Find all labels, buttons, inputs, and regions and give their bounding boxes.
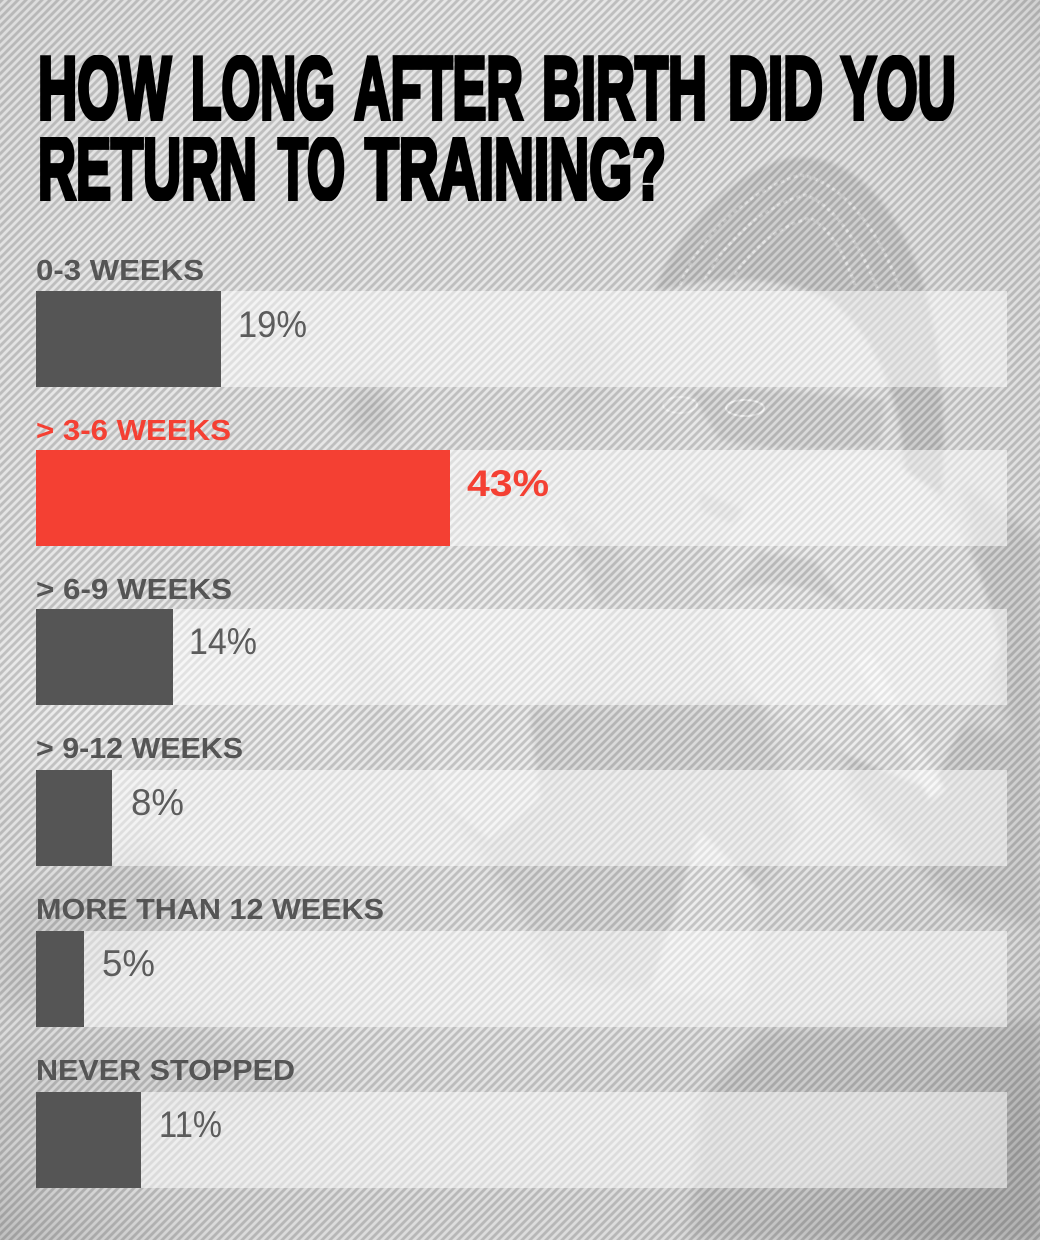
row: more than 3-6 weeks, 43% (highlighted): 43% bbox=[467, 463, 549, 504]
hair: braids bbox=[655, 157, 943, 495]
braid detail bbox=[680, 175, 900, 290]
row: more than 12 weeks, 5%: MORE THAN 12 WEEKS bbox=[36, 894, 384, 926]
title bbox=[40, 55, 954, 201]
row: more than 6-9 weeks, 14% bbox=[36, 574, 1007, 705]
eyes bbox=[663, 397, 764, 416]
title: TO bbox=[278, 118, 345, 218]
title: RETURN bbox=[38, 118, 257, 218]
title: YOU bbox=[841, 38, 956, 138]
face bbox=[655, 280, 892, 545]
row: 0-3 weeks, 19% bbox=[36, 255, 1007, 387]
row: more than 3-6 weeks, 43% (highlighted) bbox=[36, 415, 1007, 546]
row: more than 12 weeks, 5%: 5% bbox=[102, 943, 155, 984]
row: 0-3 weeks, 19%: 19% bbox=[238, 304, 307, 345]
row: never stopped, 11%: 11% bbox=[159, 1104, 222, 1145]
right glove bbox=[716, 452, 1000, 790]
row: more than 6-9 weeks, 14%: > 6-9 WEEKS bbox=[36, 574, 232, 606]
row: never stopped, 11% bbox=[36, 1055, 1007, 1188]
row: more than 3-6 weeks, 43% (highlighted): > 3-6 WEEKS bbox=[36, 415, 231, 447]
title: AFTER bbox=[354, 38, 523, 138]
left glove and forearm bbox=[378, 520, 625, 840]
title: HOW bbox=[38, 38, 171, 138]
title: DID bbox=[728, 38, 823, 138]
title: LONG bbox=[191, 38, 335, 138]
row: more than 12 weeks, 5% bbox=[36, 894, 1007, 1027]
row: 0-3 weeks, 19%: 0-3 WEEKS bbox=[36, 255, 204, 287]
row: more than 6-9 weeks, 14%: 14% bbox=[189, 621, 257, 662]
row: more than 9-12 weeks, 8%: 8% bbox=[131, 782, 184, 823]
row: more than 9-12 weeks, 8%: > 9-12 WEEKS bbox=[36, 733, 243, 765]
title: BIRTH bbox=[542, 38, 707, 138]
row: never stopped, 11%: NEVER STOPPED bbox=[36, 1055, 295, 1087]
row: more than 9-12 weeks, 8% bbox=[36, 733, 1007, 866]
title: TRAINING? bbox=[365, 118, 666, 218]
